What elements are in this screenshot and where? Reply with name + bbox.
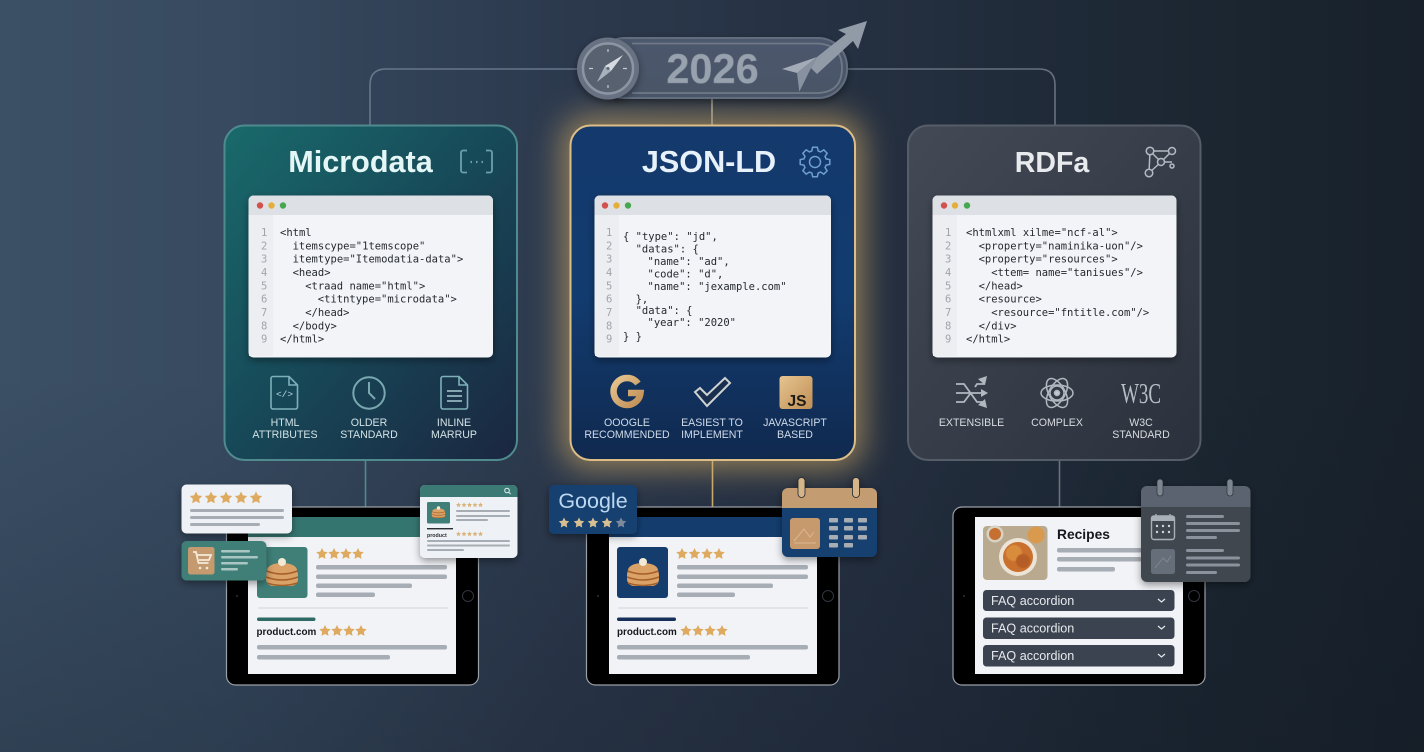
card: search result: product [427, 533, 447, 539]
code window: 7 [945, 307, 951, 319]
feature: extensible [939, 376, 1004, 429]
code window: 4 [261, 267, 267, 279]
text lines [257, 645, 447, 660]
product label: product.com [256, 627, 317, 638]
feature: inline markup [431, 376, 477, 441]
code window: 5 [606, 280, 612, 292]
code window: </head> [305, 307, 349, 319]
code window: 1 [606, 227, 612, 239]
text lines [1057, 548, 1142, 572]
icon: brackets [461, 150, 492, 172]
code window: "data": { [636, 305, 693, 317]
code window: <property="naminika-uon"/> [979, 240, 1143, 252]
icon: graph [1145, 147, 1176, 177]
glow: JSON-LD highlight [562, 117, 863, 468]
code window: 7 [261, 307, 267, 319]
card: review stars [182, 484, 292, 534]
FAQ accordion 2 [983, 618, 1174, 639]
feature: HTML attributes: HTML [271, 417, 300, 429]
code window: </html> [280, 334, 324, 346]
feature: inline markup: MARRUP [431, 429, 477, 441]
card: search result [420, 485, 518, 558]
code window [248, 196, 493, 358]
feature: older standard: OLDER [351, 417, 388, 429]
code window: <ttem= name="tanisues"/> [991, 267, 1143, 279]
code window: </html> [966, 334, 1010, 346]
code window: { "type": "jd", [623, 231, 718, 243]
code window: <property="resources"> [979, 254, 1118, 266]
code window: 6 [945, 294, 951, 306]
tablet: JSON-LD preview [586, 507, 839, 685]
code window: </body> [293, 320, 337, 332]
FAQ accordion 1 [983, 590, 1174, 611]
heading: JSON-LD: JSON-LD [642, 145, 776, 179]
text lines [677, 565, 808, 597]
code window: 3 [261, 254, 267, 266]
panel: JSON-LD [570, 126, 855, 460]
feature: W3C standard: W3C [1121, 379, 1161, 410]
code window: }, [636, 293, 648, 305]
card: Google rating: Google [558, 489, 628, 513]
code window: 5 [261, 280, 267, 292]
feature: W3C standard: STANDARD [1112, 429, 1170, 441]
code window [932, 196, 1176, 358]
card: calendar [782, 478, 877, 557]
feature: Google recommended: OOOGLE [604, 417, 650, 429]
code window: 1 [945, 227, 951, 239]
feature: easiest to implement: IMPLEMENT [681, 429, 743, 441]
code window: 5 [945, 280, 951, 292]
text lines [316, 565, 447, 597]
text lines [617, 645, 808, 660]
card: shopping [182, 541, 266, 580]
feature: complex: COMPLEX [1031, 417, 1083, 429]
code window: "year": "2020" [648, 317, 736, 329]
code window: 4 [945, 267, 951, 279]
feature: easiest to implement [681, 378, 743, 441]
feature: Google recommended: RECOMMENDED [584, 429, 670, 441]
code window: 8 [945, 320, 951, 332]
feature: older standard [340, 377, 398, 441]
icon: rising arrow [782, 21, 867, 92]
code window: 2 [606, 240, 612, 252]
code window: </head> [979, 280, 1023, 292]
product label: product.com [617, 627, 677, 638]
code window: 7 [606, 307, 612, 319]
code window: <htmlxml xilme="ncf-al"> [966, 227, 1118, 239]
feature: Google recommended [584, 378, 670, 441]
FAQ accordion 1: FAQ accordion [991, 594, 1074, 608]
code window: 1 [261, 227, 267, 239]
code window: <resource="fntitle.com"/> [991, 307, 1149, 319]
code window: 2 [261, 240, 267, 252]
FAQ accordion 3: FAQ accordion [991, 649, 1074, 663]
code window: itemtype="Itemodatia-data"> [293, 254, 463, 266]
connector lines [366, 69, 1060, 507]
code window: "name": "jexample.com" [648, 281, 787, 293]
code window: "code": "d", [648, 269, 723, 281]
code window: </div> [979, 320, 1017, 332]
panel: Microdata [224, 126, 517, 460]
feature: W3C standard [1112, 379, 1170, 441]
rating stars [676, 548, 725, 559]
feature: JavaScript based: JAVASCRIPT [763, 417, 827, 429]
year badge [577, 21, 867, 100]
card: Google rating [549, 485, 637, 534]
FAQ accordion 2: FAQ accordion [991, 622, 1074, 636]
code window: <head> [293, 267, 331, 279]
code window: itemscype="1temscope" [293, 240, 425, 252]
food photo [983, 526, 1048, 580]
code window: <resource> [979, 294, 1042, 306]
code window: 4 [606, 267, 612, 279]
feature: JavaScript based: JS [788, 393, 806, 410]
feature: older standard: STANDARD [340, 429, 398, 441]
rating stars [316, 548, 364, 559]
icon: compass [577, 38, 639, 100]
FAQ accordion 3 [983, 645, 1174, 666]
code window: 3 [945, 254, 951, 266]
code window: <traad name="html"> [305, 280, 425, 292]
card: event calendar [1141, 479, 1250, 582]
code window: } } [623, 331, 642, 343]
code window: 9 [945, 334, 951, 346]
feature: easiest to implement: EASIEST TO [681, 417, 743, 429]
code window: 2 [945, 240, 951, 252]
tablet: Microdata preview [226, 507, 478, 685]
feature: HTML attributes [252, 376, 318, 441]
rating stars [680, 625, 728, 636]
code window: 6 [606, 294, 612, 306]
icon: gear [800, 147, 830, 177]
code window: 6 [261, 294, 267, 306]
feature: inline markup: INLINE [437, 417, 471, 429]
heading: recipes: Recipes [1057, 527, 1110, 542]
code window: 9 [606, 334, 612, 346]
feature: W3C standard: W3C [1129, 417, 1153, 429]
feature: extensible: EXTENSIBLE [939, 417, 1004, 429]
heading: Microdata: Microdata [288, 145, 434, 179]
code window [594, 196, 831, 358]
rating stars [319, 625, 367, 636]
code window: <titntype="microdata"> [318, 294, 457, 306]
code window: "datas": { [636, 244, 699, 256]
feature: JavaScript based [763, 376, 827, 441]
feature: JavaScript based: BASED [777, 429, 813, 441]
feature: complex [1031, 375, 1083, 429]
code window: 3 [606, 254, 612, 266]
year text: 2026 [666, 45, 759, 92]
code window: 9 [261, 334, 267, 346]
code window: 8 [606, 320, 612, 332]
thumbnail [257, 547, 308, 598]
code window: <html [280, 227, 312, 239]
code window: "name": "ad", [648, 256, 730, 268]
code window: 8 [261, 320, 267, 332]
pill [596, 38, 847, 98]
thumbnail [617, 547, 668, 598]
panel: RDFa [908, 126, 1200, 460]
feature: HTML attributes: </> [276, 389, 293, 400]
feature: HTML attributes: ATTRIBUTES [252, 429, 318, 441]
tablet: RDFa preview [953, 507, 1205, 685]
heading: RDFa: RDFa [1015, 147, 1090, 179]
